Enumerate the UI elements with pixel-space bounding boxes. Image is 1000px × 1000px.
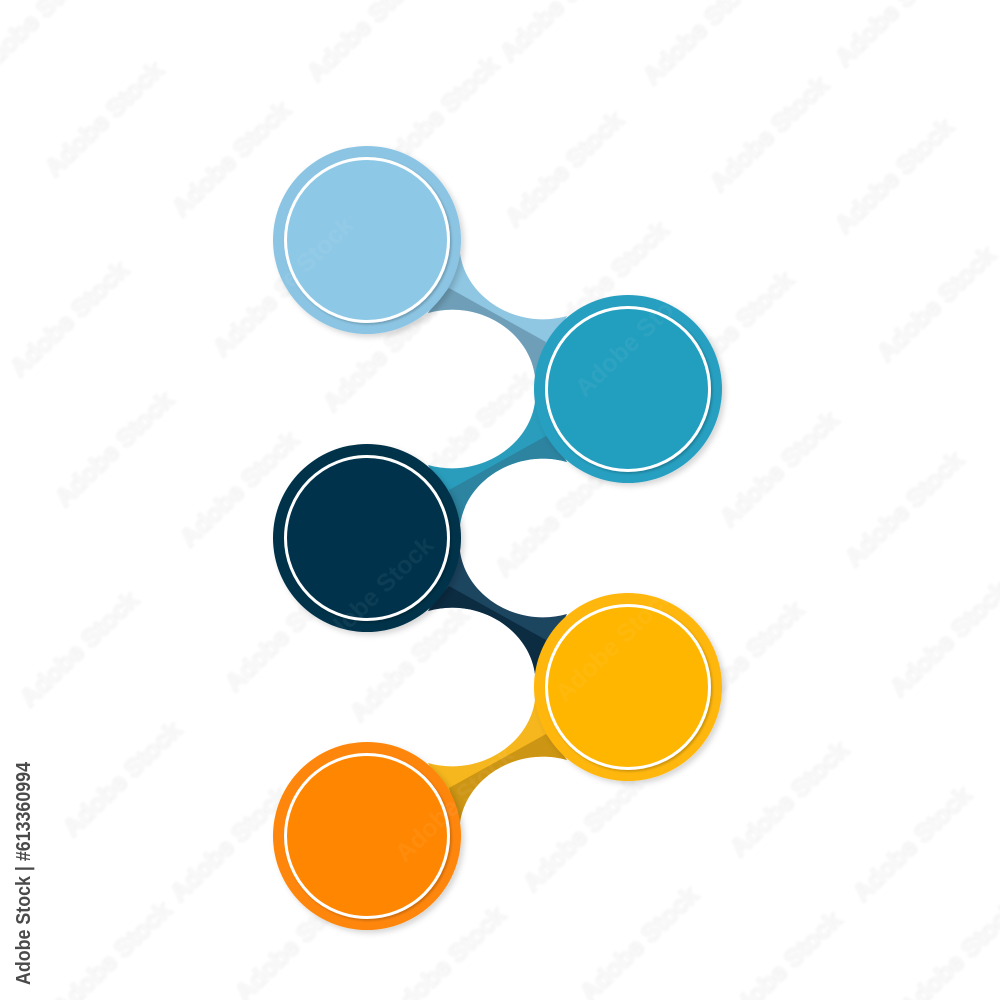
circle: step 3 navy bbox=[273, 444, 461, 632]
watermark pattern: Adobe Stock bbox=[705, 71, 834, 197]
watermark over circles: Adobe Stock bbox=[550, 581, 679, 707]
watermark pattern: Adobe Stock bbox=[670, 266, 799, 392]
watermark pattern: Adobe Stock bbox=[208, 236, 337, 362]
circle: step 5 orange bbox=[273, 742, 461, 930]
watermark pattern: Adobe Stock bbox=[50, 386, 179, 512]
watermark over circles: Adobe Stock bbox=[230, 211, 359, 337]
watermark pattern: Adobe Stock bbox=[518, 771, 647, 897]
watermark pattern: Adobe Stock bbox=[490, 456, 619, 582]
watermark pattern: Adobe Stock bbox=[872, 241, 1000, 367]
watermark pattern: Adobe Stock bbox=[58, 716, 187, 842]
watermark pattern: Adobe Stock bbox=[545, 216, 674, 342]
watermark pattern: Adobe Stock bbox=[220, 571, 349, 697]
connector: navy to yellow bbox=[428, 551, 567, 674]
watermark pattern: Adobe Stock bbox=[830, 113, 959, 239]
connector: light blue to teal bbox=[428, 253, 567, 376]
watermark over circles: Adobe Stock bbox=[390, 741, 519, 867]
watermark over circles: Adobe Stock bbox=[310, 531, 439, 657]
watermark pattern: Adobe Stock bbox=[410, 366, 539, 492]
circle: step 2 teal bbox=[534, 295, 722, 483]
watermark pattern: Adobe Stock bbox=[500, 106, 629, 232]
watermark pattern: Adobe Stock bbox=[725, 736, 854, 862]
watermark pattern: Adobe Stock bbox=[5, 256, 134, 382]
circle: step 4 yellow bbox=[534, 593, 722, 781]
watermark pattern: Adobe Stock bbox=[318, 291, 447, 417]
circle: step 1 light blue bbox=[273, 146, 461, 334]
connector: yellow to orange bbox=[428, 700, 567, 823]
stock id caption: Adobe Stock | #613360994 bbox=[13, 761, 35, 985]
watermark pattern: Adobe Stock bbox=[840, 446, 969, 572]
watermark over circles bbox=[230, 211, 699, 867]
watermark pattern: Adobe Stock bbox=[680, 596, 809, 722]
watermark pattern: Adobe Stock bbox=[175, 426, 304, 552]
connector: teal to navy bbox=[428, 402, 567, 525]
watermark pattern: Adobe Stock bbox=[165, 781, 294, 907]
watermark pattern: Adobe Stock bbox=[15, 586, 144, 712]
watermark pattern: Adobe Stock bbox=[715, 406, 844, 532]
watermark pattern: Adobe Stock bbox=[375, 51, 504, 177]
watermark pattern: Adobe Stock bbox=[345, 601, 474, 727]
watermark over circles: Adobe Stock bbox=[570, 276, 699, 402]
watermark pattern: Adobe Stock bbox=[40, 56, 169, 182]
watermark pattern: Adobe Stock bbox=[167, 96, 296, 222]
watermark pattern: Adobe Stock bbox=[848, 781, 977, 907]
